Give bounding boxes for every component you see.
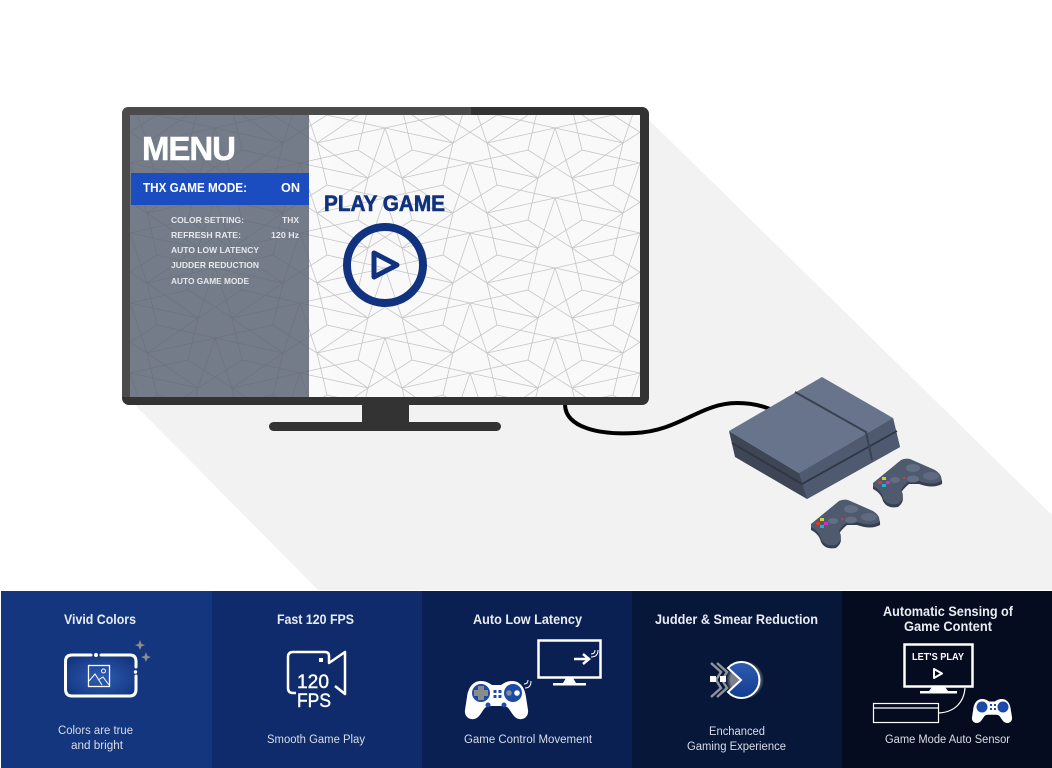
caption: Game Control Movement [464,734,593,746]
heading: Automatic Sensing of [883,604,1013,619]
caption: Game Mode Auto Sensor [885,734,1010,746]
monitor [122,107,649,431]
menu settings: AUTO GAME MODE [171,276,249,286]
monitor frame [122,107,649,405]
icon: game controller [465,680,531,719]
monitor stand [269,404,501,431]
caption: Smooth Game Play [267,734,365,746]
heading: Fast 120 FPS [277,612,354,627]
icon: camera 120 fps [288,652,345,712]
game controllers [811,459,942,548]
heading: Judder & Smear Reduction [655,612,818,627]
panel: auto low latency [422,591,632,768]
icon: tv with arrow [538,640,600,686]
caption: and bright [71,740,124,752]
icon: tv lets play: LET'S PLAY [912,651,964,663]
menu panel [130,115,309,397]
heading [883,604,1013,634]
menu settings: COLOR SETTING: [171,215,244,225]
heading: Game Content [904,619,992,634]
menu settings: AUTO LOW LATENCY [171,245,259,255]
highlighted row: THX GAME MODE: [143,181,247,195]
caption: Colors are true [58,725,133,737]
panel: fast 120 fps [212,591,422,768]
heading: Auto Low Latency [473,612,582,627]
icon: camera 120 fps: FPS [297,691,331,712]
menu settings [171,215,299,286]
caption [58,725,133,752]
game console [729,377,900,499]
highlighted row [131,173,309,205]
cable [565,403,770,433]
icon: pacman motion [710,661,764,699]
caption [687,726,786,753]
icon: screen with picture [66,640,151,696]
menu settings: THX [282,215,299,225]
screen background [130,115,640,397]
menu settings: REFRESH RATE: [171,230,241,240]
caption: Enchanced [709,726,765,738]
highlighted row: ON [281,181,300,195]
icon: camera 120 fps: 120 [297,672,329,693]
icon: console box and cable [874,688,965,722]
screen pattern [309,115,640,397]
heading: Vivid Colors [64,612,136,627]
icon: play button [347,227,423,303]
panel: judder and smear reduction [632,591,842,768]
icon: tv lets play [904,644,972,694]
background shadow [130,120,1052,590]
play game heading: PLAY GAME [324,191,445,216]
menu settings: JUDDER REDUCTION [171,260,259,270]
icon: game controller [972,699,1012,723]
menu settings: 120 Hz [271,230,299,240]
panel: automatic sensing [842,591,1052,768]
menu title: MENU [142,130,236,167]
panel: vivid colors [1,591,212,768]
caption: Gaming Experience [687,741,786,753]
